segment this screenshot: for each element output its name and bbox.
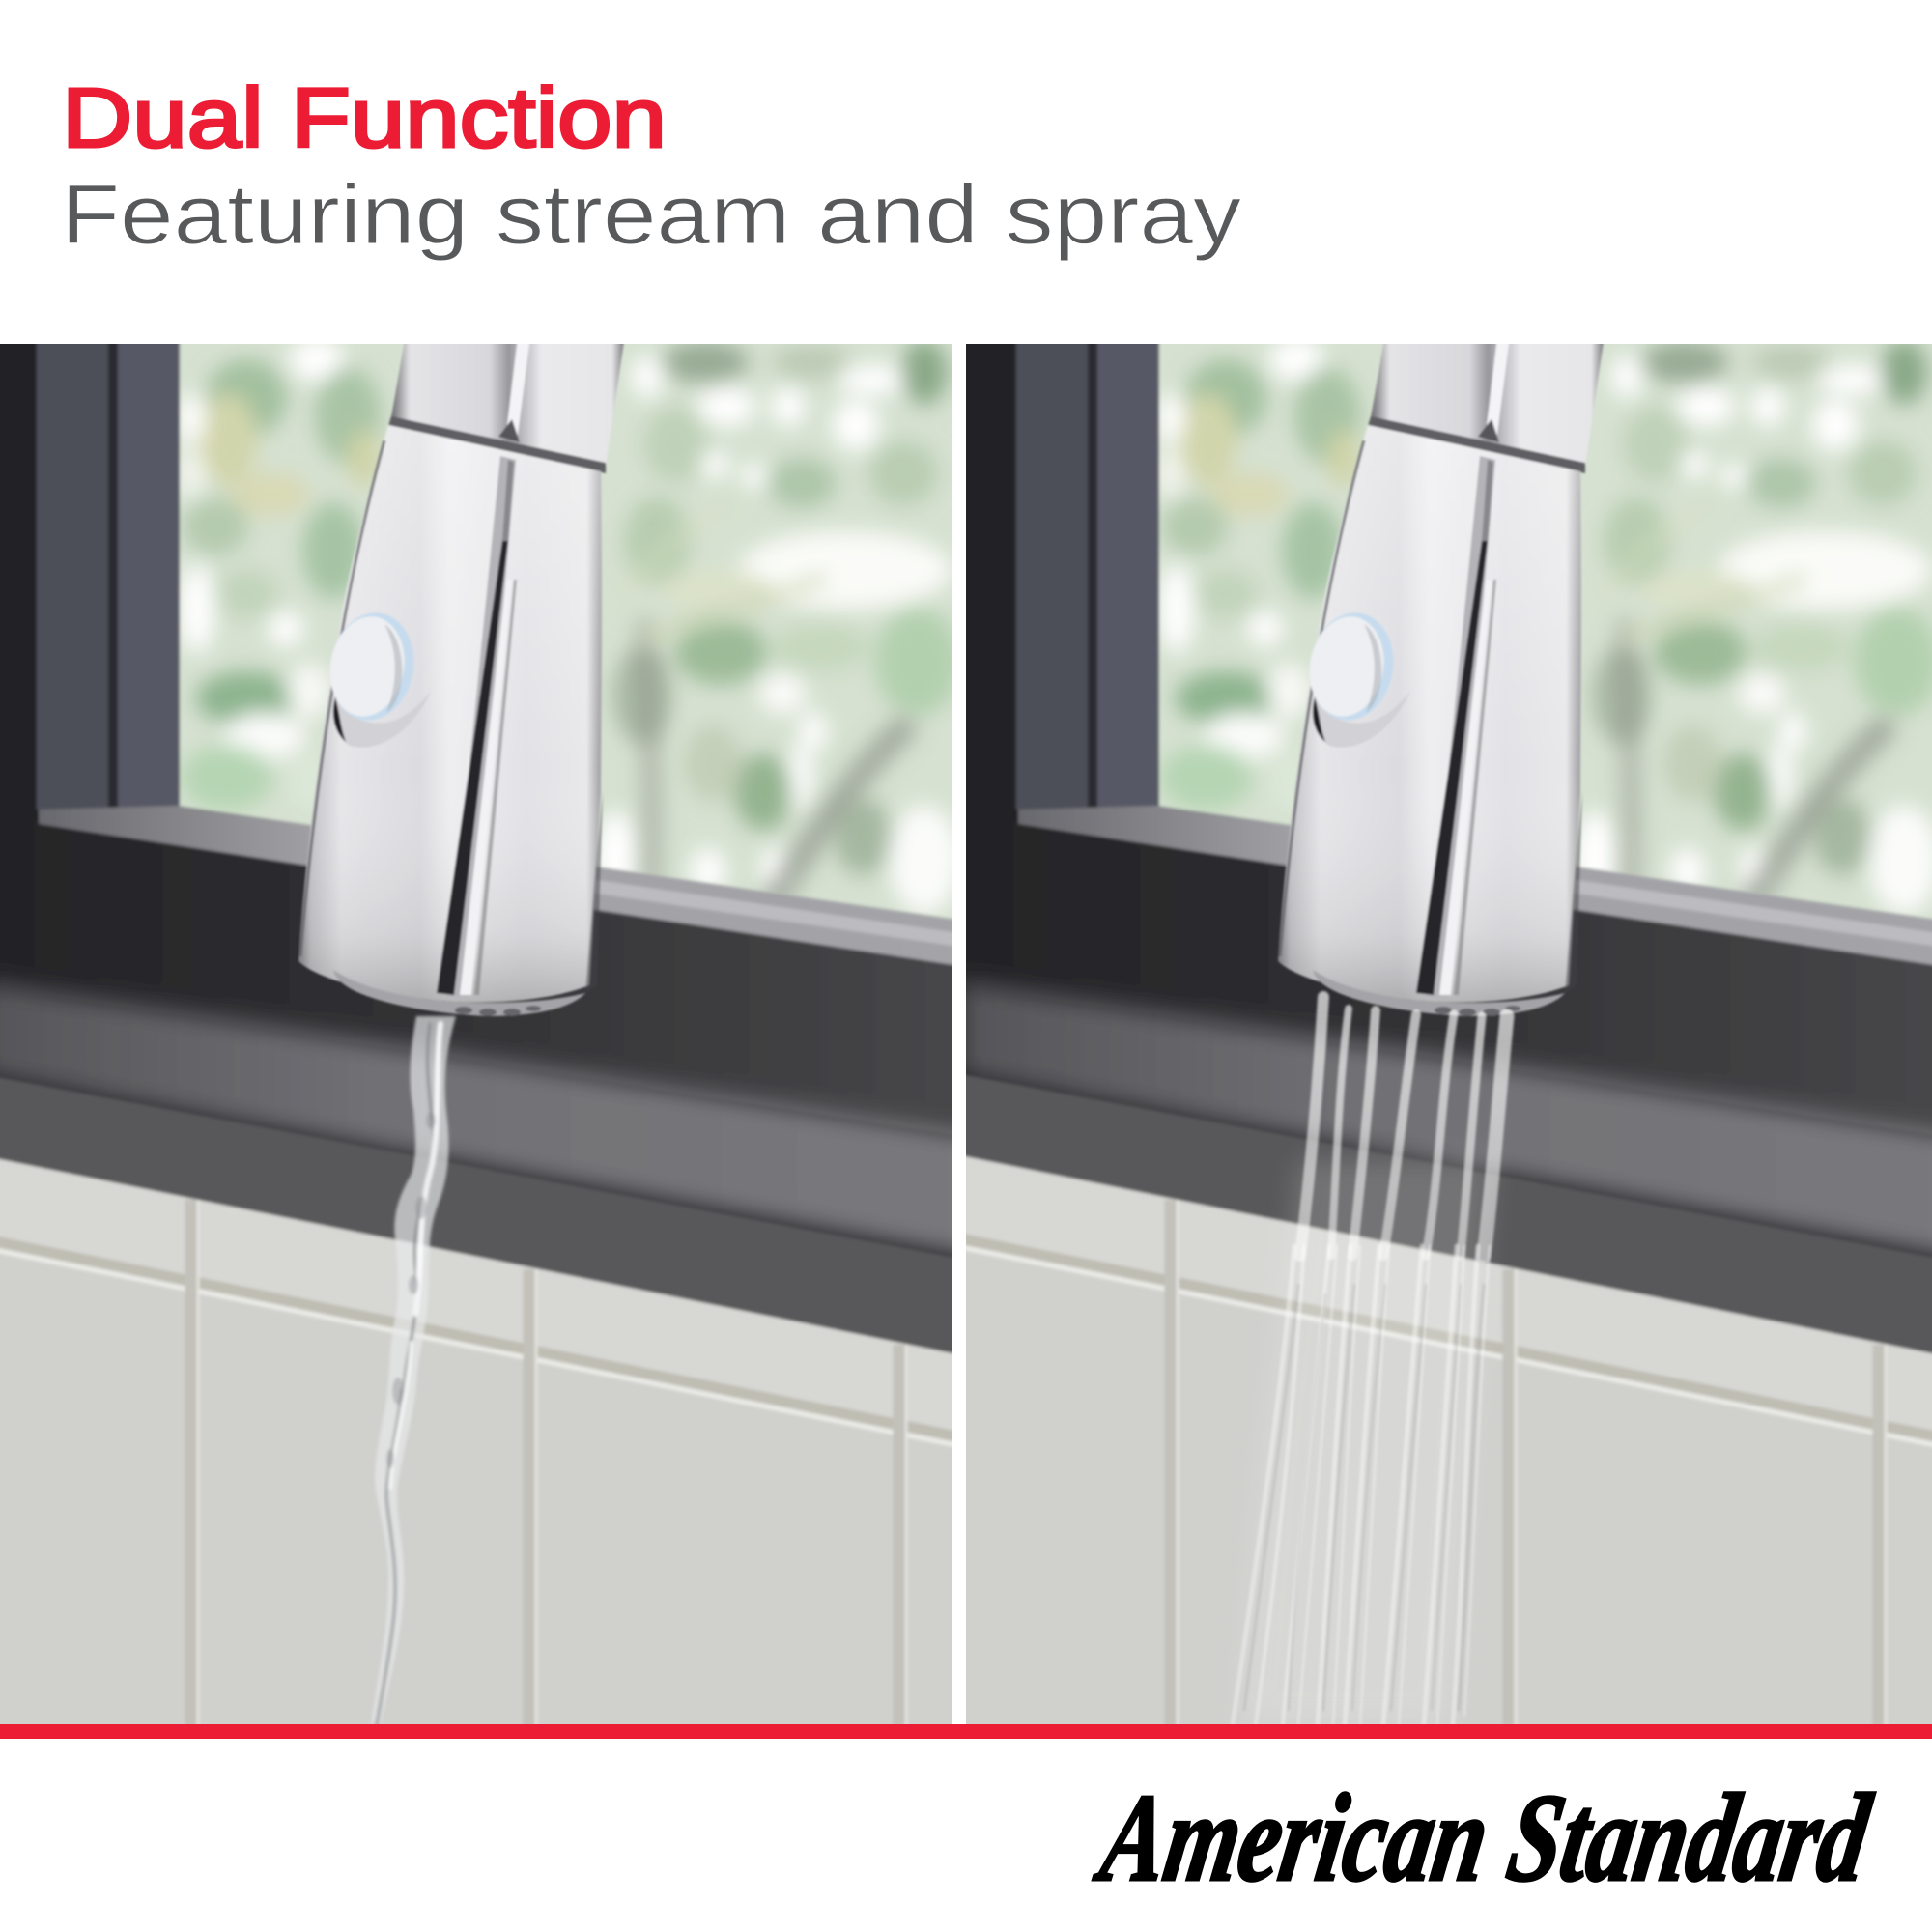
window and kitchen background (0, 328, 985, 1758)
water: spray streams (1233, 997, 1507, 1724)
water: single stream (371, 1016, 456, 1724)
red divider bar (0, 1724, 1932, 1739)
title (61, 71, 1242, 262)
panel: stream photo (0, 328, 985, 1758)
window and kitchen background (960, 328, 1932, 1758)
subheading: Featuring stream and spray (61, 168, 1242, 262)
panel: spray photo (960, 328, 1932, 1758)
faucet spray head (1278, 328, 1605, 1016)
mist (1287, 1151, 1487, 1346)
faucet spray head (298, 328, 626, 1016)
heading: Dual Function: Dual Function (62, 71, 667, 165)
